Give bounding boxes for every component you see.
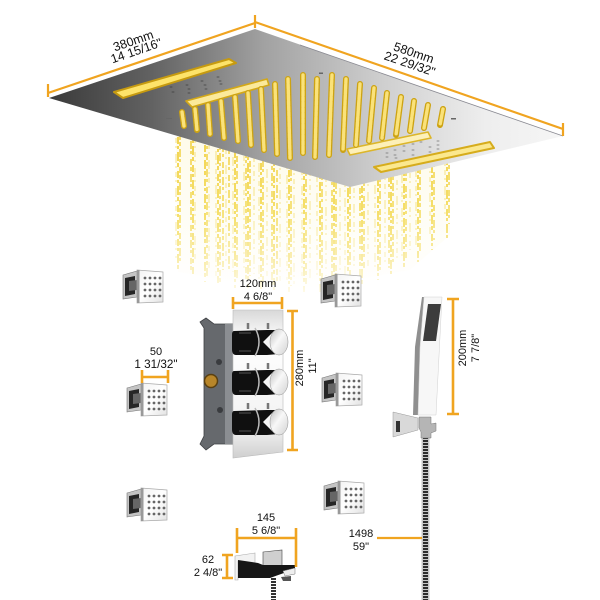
valve back box xyxy=(200,318,234,450)
small screw holes xyxy=(166,72,456,120)
body jet: middle right xyxy=(322,373,362,406)
LED bar: near right xyxy=(347,132,431,155)
LED bar: near left xyxy=(186,79,269,107)
thermostatic valve xyxy=(200,310,288,458)
dimension: spout height 62: 2 4/8" xyxy=(194,567,222,579)
shower head panel xyxy=(49,29,563,187)
yellow rain falling from the shower head xyxy=(176,94,449,292)
dimension: valve height 280mm: 280mm xyxy=(294,350,306,386)
panel right edge xyxy=(300,45,563,136)
LED bar: far right xyxy=(374,142,494,172)
dimension: spout length 145: 145 xyxy=(257,512,275,524)
spout hose xyxy=(271,578,276,600)
dimension: 380mm width: 380mm xyxy=(111,28,155,54)
back box ports xyxy=(216,359,223,413)
bracket dark detail xyxy=(396,421,400,432)
mist nozzles right xyxy=(386,141,439,158)
dimension: valve height 280mm: 11" xyxy=(307,358,319,374)
spout wall plate xyxy=(235,553,255,580)
dimension: hand shower 200mm: 7 7/8" xyxy=(470,334,482,362)
LED bar: far left xyxy=(114,59,236,98)
middle knob xyxy=(232,363,288,396)
panel surface xyxy=(49,29,563,187)
spout body xyxy=(238,560,295,578)
spout tip xyxy=(283,568,295,576)
rain nozzle rows xyxy=(182,75,443,158)
dimension: valve height 280mm xyxy=(287,311,319,450)
tub spout xyxy=(235,550,295,600)
dimension: hand shower 200mm: 200mm xyxy=(457,330,469,366)
dimension: valve width 120mm xyxy=(233,278,282,309)
valve face plate xyxy=(233,310,283,458)
dimension: 580mm length xyxy=(255,15,563,136)
dimension: spout height 62: 62 xyxy=(202,554,214,566)
pale yellow haze under the shower head xyxy=(176,120,450,292)
handle face xyxy=(418,297,442,415)
dimension: valve width 120mm: 4 6/8" xyxy=(244,291,272,303)
back box light stripe xyxy=(225,324,233,444)
dimension: jet width 50 xyxy=(134,346,178,383)
dimension: 380mm width: 14 15/16" xyxy=(109,36,164,66)
spout handle xyxy=(263,550,282,566)
dimension: 580mm length: 22 29/32" xyxy=(382,49,437,79)
nozzle glow xyxy=(182,75,443,158)
spray grid xyxy=(423,304,441,341)
dimension: hose 1498 xyxy=(349,528,422,553)
dimension: hose 1498: 59" xyxy=(353,541,369,553)
body jet: middle left xyxy=(127,383,167,416)
dimension: hose 1498: 1498 xyxy=(349,528,373,540)
dimension: spout length 145: 5 6/8" xyxy=(252,525,280,537)
nozzle outlines xyxy=(182,75,443,158)
dimension: 580mm length: 580mm xyxy=(392,40,436,66)
mist nozzles left xyxy=(170,77,222,93)
dimension: 380mm width xyxy=(48,23,255,97)
body jet: lower left xyxy=(127,488,167,521)
dimension: spout length 145 xyxy=(237,512,296,567)
hand shower xyxy=(393,297,442,600)
hose xyxy=(422,437,430,600)
body jet: upper left xyxy=(123,270,163,303)
dimension: hand shower 200mm xyxy=(447,299,482,414)
handle side xyxy=(413,297,428,415)
brass inlet xyxy=(204,374,218,388)
dimension: jet width 50: 1 31/32" xyxy=(134,358,178,371)
body jet: upper right xyxy=(321,274,361,307)
body jet: lower right xyxy=(324,481,364,514)
dimension: spout height 62 xyxy=(194,554,233,579)
dimension: valve width 120mm: 120mm xyxy=(240,278,276,290)
hose connector xyxy=(419,417,436,438)
wall bracket xyxy=(393,412,418,437)
top knob xyxy=(232,323,288,356)
diverter xyxy=(281,576,291,581)
bottom knob xyxy=(232,403,288,436)
dimension: jet width 50: 50 xyxy=(150,346,162,358)
